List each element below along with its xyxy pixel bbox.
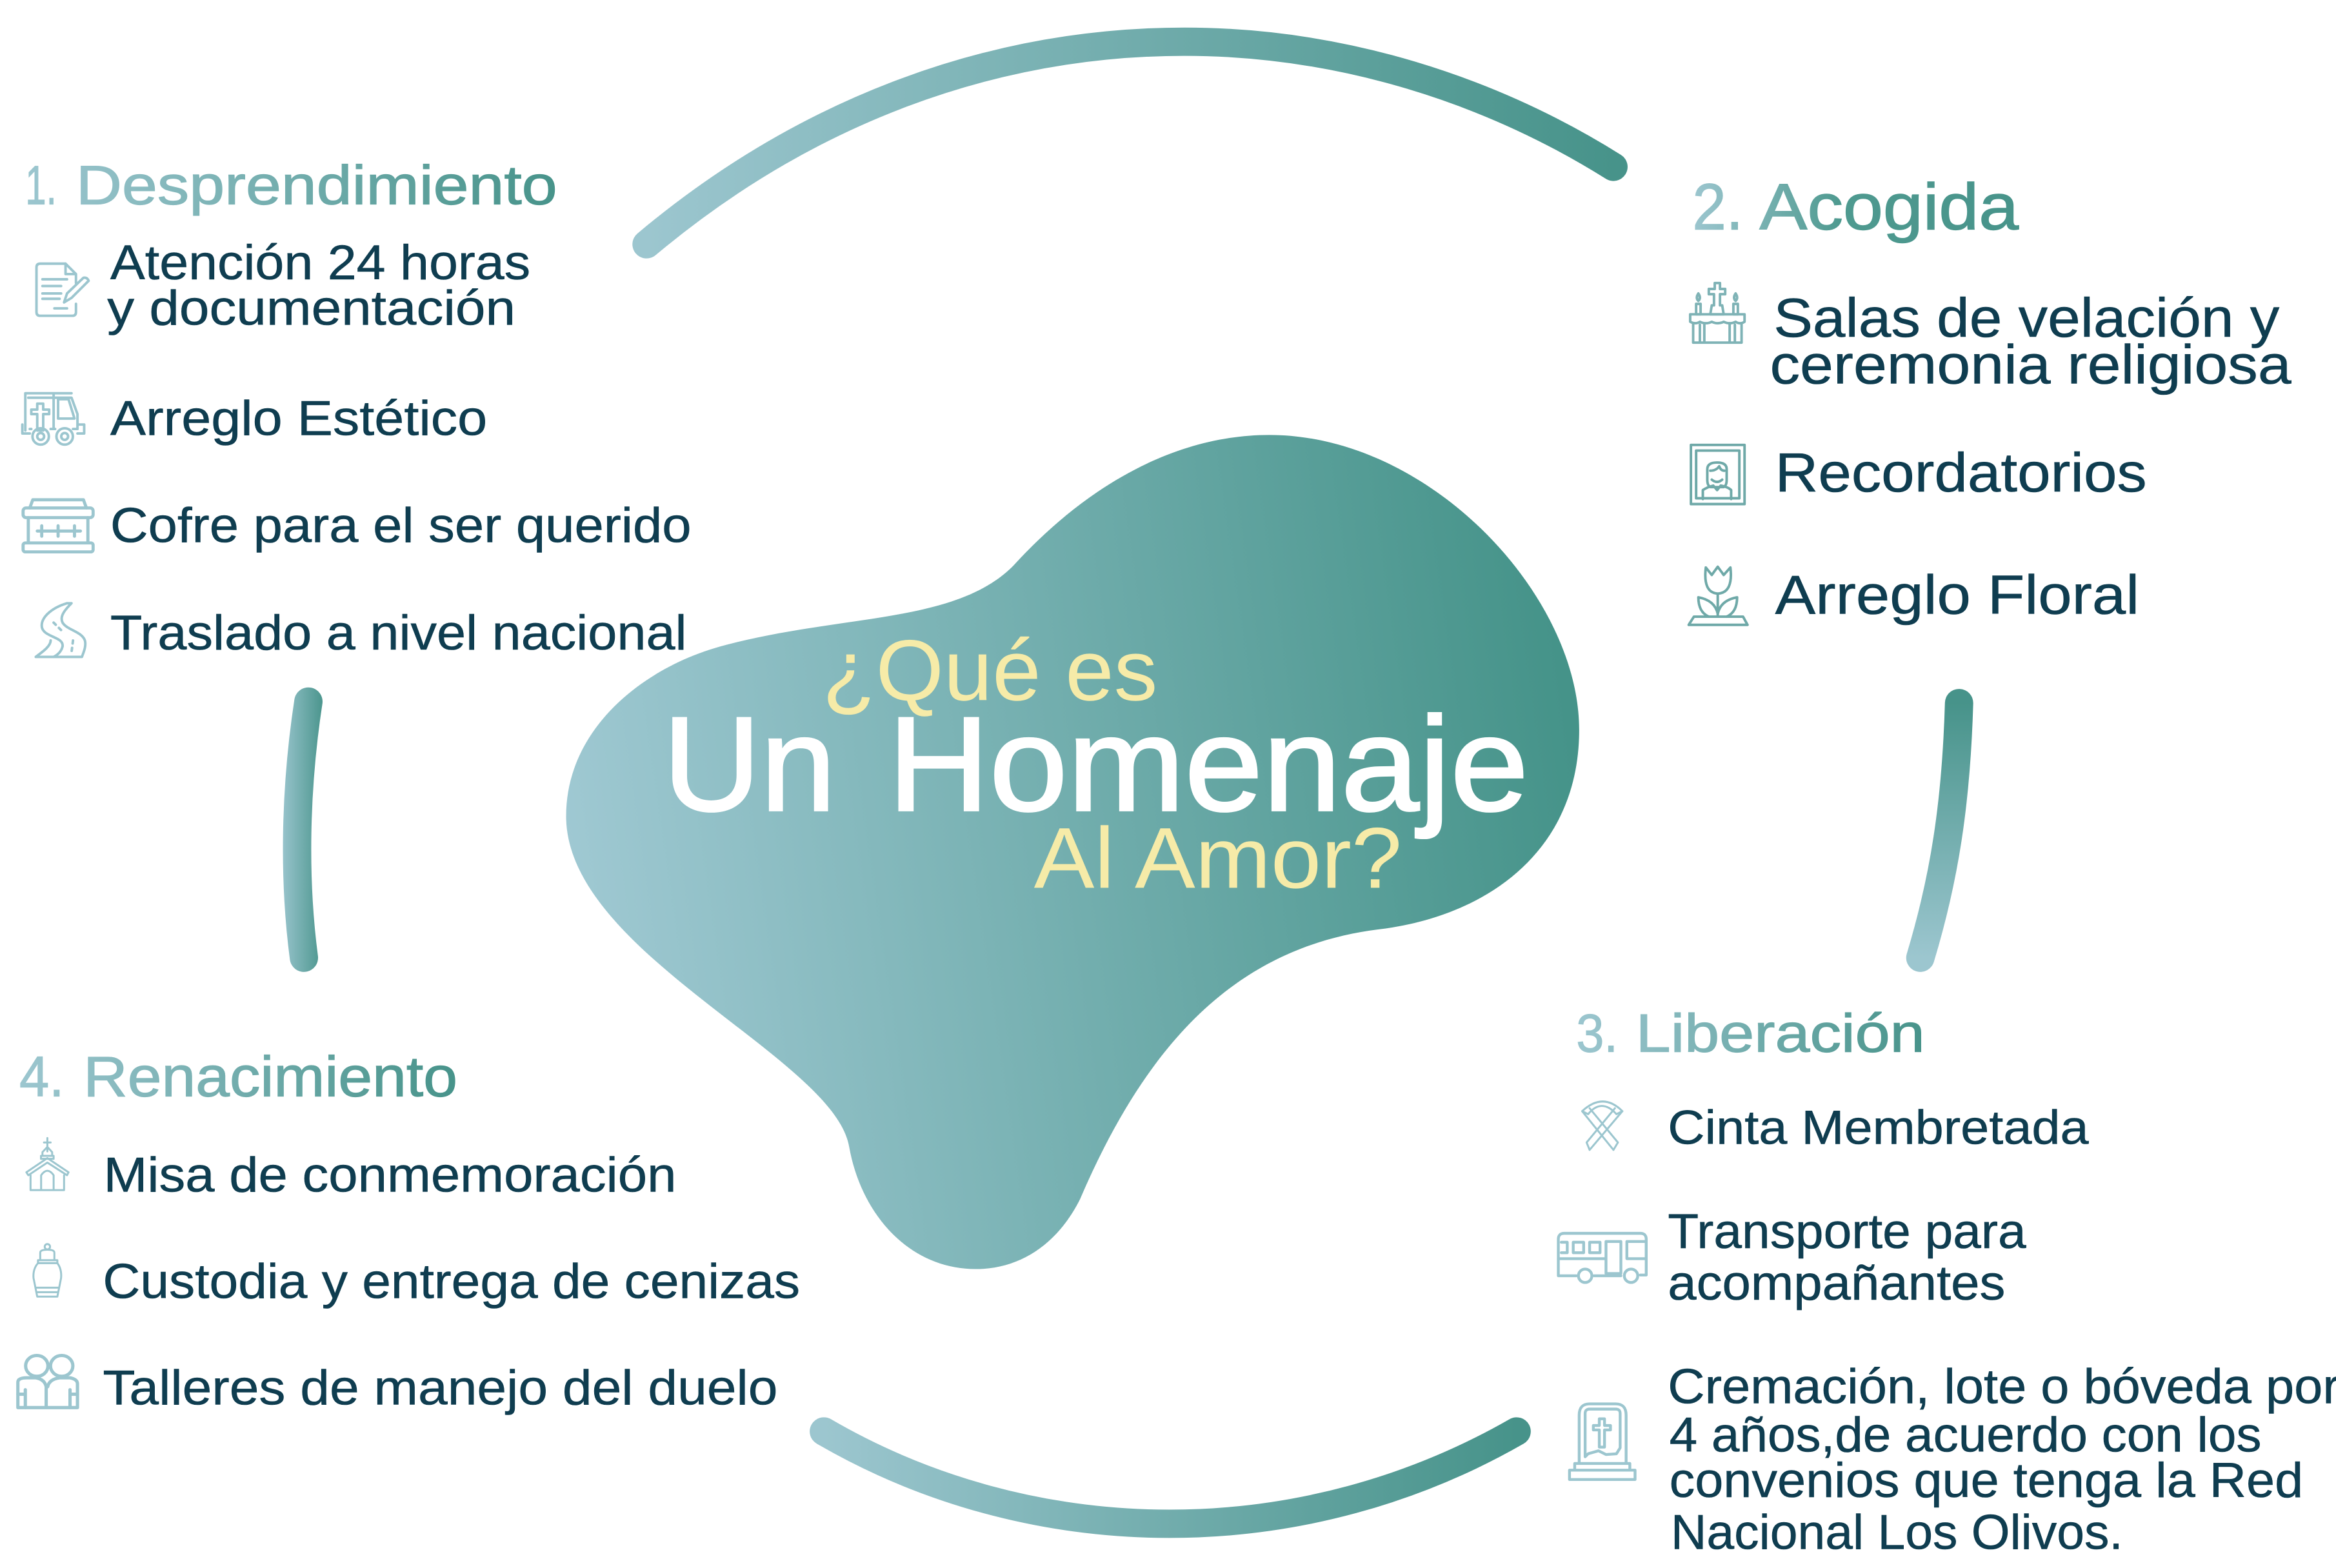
arc: left — [297, 702, 308, 958]
icon: tombstone — [1570, 1404, 1635, 1480]
text: convenios que tenga la Red — [1670, 1453, 2303, 1508]
icon: ribbon — [1582, 1102, 1622, 1150]
text: Atención 24 horas — [110, 235, 530, 290]
text: Transporte para — [1668, 1204, 2026, 1259]
icon: road — [35, 603, 85, 657]
item: Transporte — [1559, 1204, 2026, 1311]
icon: tulip — [1689, 567, 1748, 625]
heading: Desprendimiento — [76, 155, 557, 216]
heading: 3. — [1576, 1003, 1618, 1063]
text: Cinta Membretada — [1668, 1101, 2090, 1155]
text: Cofre para el ser querido — [110, 499, 692, 553]
item: Traslado — [35, 603, 687, 660]
icon: people — [18, 1355, 77, 1407]
heading: Acogida — [1759, 170, 2019, 244]
item: Talleres — [18, 1355, 777, 1416]
panel: 1. Desprendimiento — [23, 155, 692, 660]
panel: 2. Acogida — [1689, 170, 2291, 626]
icon: church — [26, 1138, 68, 1190]
title line 2: Homenaje — [888, 690, 1528, 839]
text: acompañantes — [1668, 1256, 2005, 1311]
text: Misa de conmemoración — [103, 1147, 676, 1202]
item: Atención — [37, 235, 530, 335]
text: Salas de velación y — [1773, 288, 2280, 349]
arc: bottom — [824, 1431, 1517, 1523]
heading: Liberación — [1636, 1003, 1925, 1063]
panel: 4. Renacimiento — [18, 1046, 800, 1416]
arc: right — [1921, 703, 1959, 958]
item: Misa — [26, 1138, 676, 1202]
central blob with title — [566, 435, 1579, 1269]
icon: coffin — [23, 500, 93, 552]
item: Cremación — [1570, 1359, 2336, 1560]
panel: 3. Liberación — [1559, 1003, 2336, 1560]
arc: top — [646, 42, 1613, 244]
item: Arreglo Estético — [23, 391, 487, 446]
icon: bus — [1559, 1233, 1646, 1282]
item: Cinta — [1582, 1101, 2090, 1155]
heading: Renacimiento — [83, 1046, 457, 1109]
title line 1: ¿Qué es — [823, 622, 1157, 719]
text: Custodia y entrega de cenizas — [103, 1255, 800, 1309]
title line 2: Un — [663, 690, 836, 839]
icon: hearse — [23, 393, 84, 444]
text: Cremación, lote o bóveda por — [1668, 1359, 2336, 1414]
item: Custodia — [34, 1244, 800, 1309]
text: Talleres de manejo del duelo — [103, 1361, 777, 1416]
heading: 2. — [1692, 170, 1743, 244]
text: Traslado a nivel nacional — [110, 606, 687, 660]
item: Salas de velación — [1690, 283, 2291, 396]
text: Arreglo Floral — [1775, 564, 2139, 626]
title line 3: Al Amor? — [1034, 810, 1402, 906]
icon: urn — [34, 1244, 61, 1296]
item: Recordatorios — [1691, 442, 2147, 504]
icon: altar — [1690, 283, 1744, 342]
text: Recordatorios — [1775, 442, 2147, 504]
heading: 4. — [19, 1046, 64, 1109]
icon: document and pen — [37, 264, 88, 316]
item: Arreglo Floral — [1689, 564, 2139, 626]
icon: portrait frame — [1691, 445, 1744, 504]
heading: 1. — [25, 155, 57, 216]
text: y documentación — [107, 281, 515, 335]
blob shape — [566, 435, 1579, 1269]
text: 4 años,de acuerdo con los — [1670, 1407, 2262, 1462]
text: Arreglo Estético — [110, 391, 487, 446]
text: Nacional Los Olivos. — [1671, 1505, 2123, 1560]
text: ceremonia religiosa — [1770, 335, 2291, 396]
item: Cofre — [23, 499, 692, 553]
